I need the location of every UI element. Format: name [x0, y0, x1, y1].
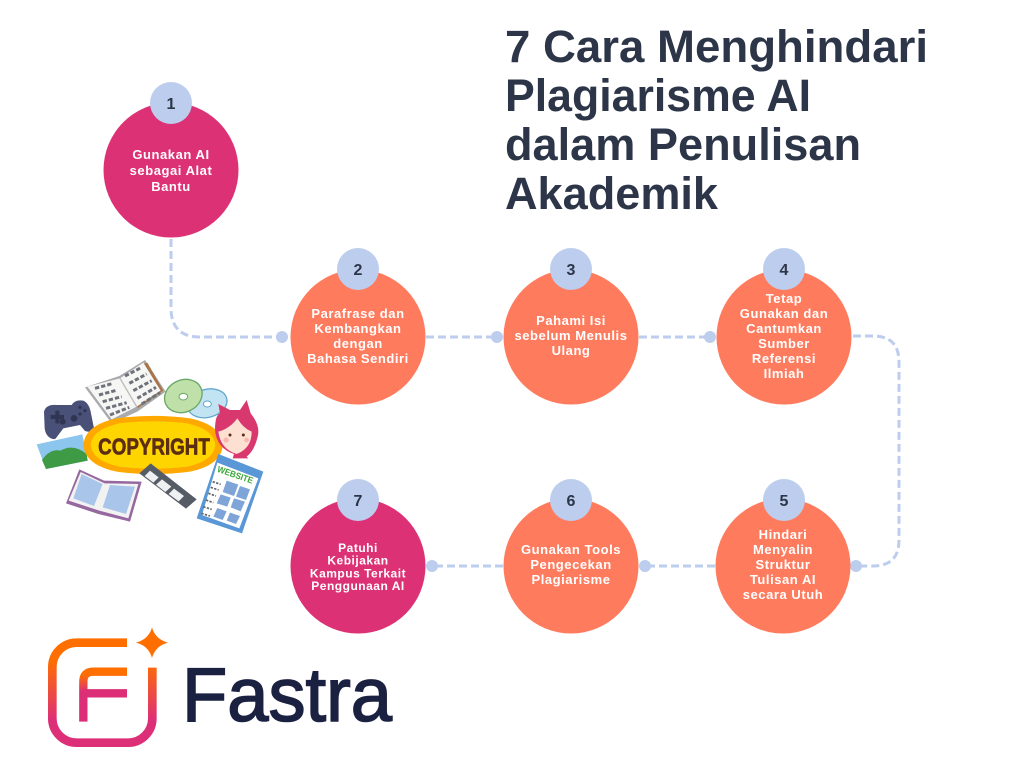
copyright badge: COPYRIGHT [98, 433, 210, 459]
icon: character [215, 400, 258, 458]
icon: website page: WEBSITE [216, 464, 255, 486]
step 5: Menyalin [753, 542, 813, 557]
connector: step 1 to step 2 [171, 239, 288, 343]
title: dalam Penulisan [505, 119, 861, 170]
step 5: Struktur [756, 557, 810, 572]
step 3: sebelum Menulis [514, 328, 628, 343]
step 1: Gunakan AI [132, 147, 210, 162]
step 2: Parafrase dan [311, 306, 405, 321]
step 3: 3 [567, 262, 576, 279]
step 2: dengan [333, 336, 383, 351]
step 4: Tetap [766, 291, 802, 306]
icon: game controller [44, 400, 94, 439]
title: Plagiarisme AI [505, 70, 811, 121]
step 4: Ilmiah [764, 366, 804, 381]
step 7: Patuhi [338, 541, 378, 555]
step 5: Tulisan AI [750, 572, 816, 587]
step 2: Kembangkan [314, 321, 402, 336]
title: 7 Cara Menghindari [505, 21, 928, 72]
step 2: Bahasa Sendiri [307, 351, 409, 366]
connector: step 5 to step 6 [639, 560, 715, 572]
step 6: 6 [567, 493, 576, 510]
connector: step 3 to step 4 [639, 331, 716, 343]
logo: Fastra [52, 627, 393, 743]
illustration: copyright collage [35, 360, 263, 533]
step 1 [104, 82, 238, 238]
step 4 [716, 248, 852, 404]
icon: magazine [66, 469, 142, 522]
icon: discs [159, 373, 230, 422]
step 6: Gunakan Tools [521, 542, 621, 557]
icon: film strip [139, 463, 197, 509]
step 6: Plagiarisme [531, 572, 611, 587]
step 4: Gunakan dan [740, 306, 828, 321]
icon: open book top [85, 360, 166, 423]
step 1: sebagai Alat [130, 163, 212, 178]
step 3: Pahami Isi [536, 313, 606, 328]
copyright badge [83, 416, 223, 474]
step 2 [290, 248, 426, 404]
connector: step 6 to step 7 [426, 560, 503, 572]
step 7: Kampus Terkait [310, 566, 406, 580]
title [505, 21, 928, 219]
step 7: Penggunaan AI [311, 579, 405, 593]
connector: step 2 to step 3 [426, 331, 503, 343]
step 1: Bantu [151, 179, 191, 194]
step 7: 7 [354, 493, 363, 510]
icon: website page [197, 454, 263, 533]
step 4: Referensi [752, 351, 816, 366]
logo wordmark: Fastra [182, 653, 393, 738]
step 6 [504, 479, 638, 634]
step 6: Pengecekan [530, 557, 612, 572]
step 2: 2 [354, 262, 363, 279]
step 5: secara Utuh [743, 587, 823, 602]
step 7 [290, 479, 426, 634]
icon: logo mark [52, 627, 168, 743]
step 7: Kebijakan [327, 554, 389, 568]
step 3 [504, 248, 638, 404]
step 4: Cantumkan [746, 321, 822, 336]
title: Akademik [505, 168, 719, 219]
step 5: 5 [780, 493, 789, 510]
step 1: 1 [167, 96, 176, 113]
step 4: Sumber [758, 336, 810, 351]
connector: step 4 to step 5 [850, 336, 899, 572]
icon: landscape photo [35, 433, 89, 471]
step 5 [716, 479, 850, 634]
step 3: Ulang [552, 343, 590, 358]
step 5: Hindari [759, 527, 807, 542]
step 4: 4 [780, 262, 789, 279]
